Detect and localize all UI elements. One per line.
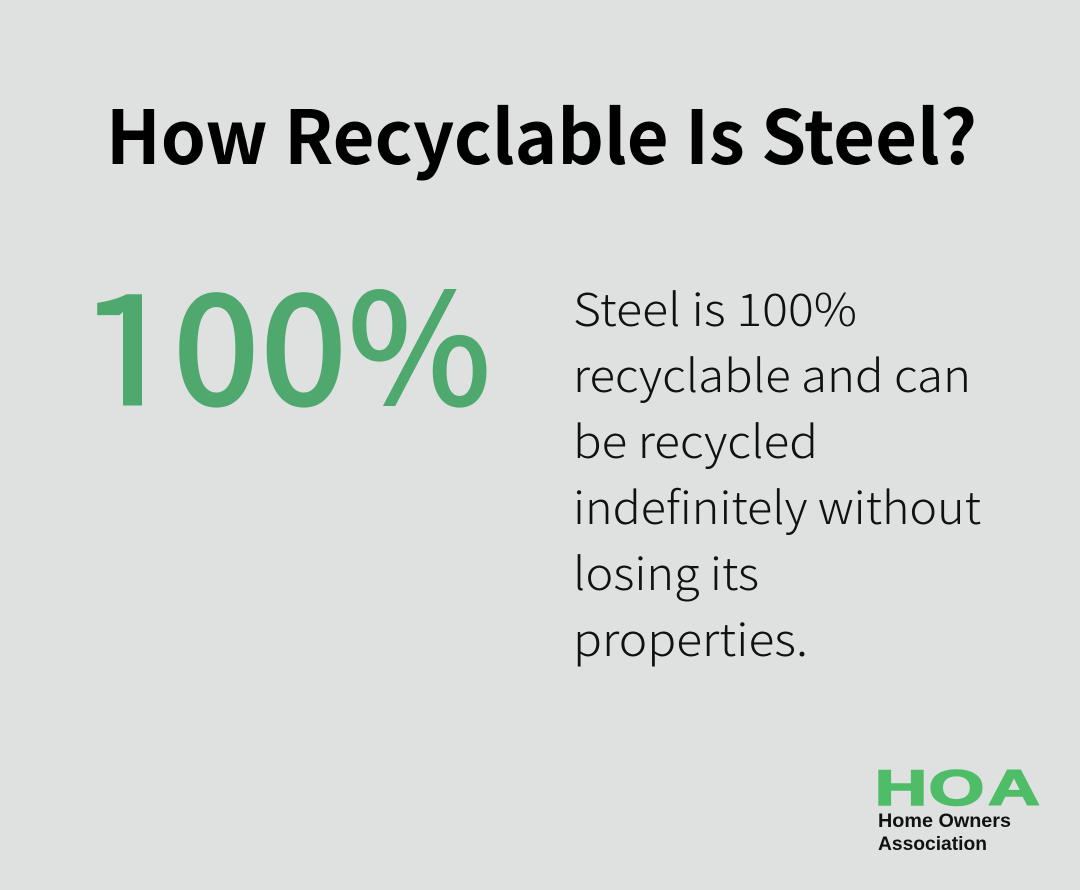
logo wordmark: Association — [878, 834, 987, 855]
description text block: properties. — [573, 604, 808, 669]
logo: Home Owners Association — [874, 760, 1040, 855]
logo mark: HOA: A — [988, 760, 1040, 816]
big statistic: 100%: 00% — [172, 227, 492, 450]
infographic canvas — [97, 104, 1040, 850]
description text block: be recycled — [573, 406, 818, 471]
logo mark: HOA: H — [874, 760, 928, 816]
big statistic: 100% — [97, 289, 486, 408]
logo mark: HOA — [874, 760, 1040, 816]
description text block — [573, 274, 981, 669]
description text block: Steel is 100% — [573, 274, 857, 339]
description text block: recyclable and can — [573, 340, 971, 405]
big statistic: 100%: 1 — [77, 227, 180, 450]
title: How Recyclable Is Steel? — [106, 79, 977, 186]
logo mark: HOA: O — [928, 760, 984, 816]
description text block: indefinitely without — [573, 472, 981, 537]
description text block: losing its — [573, 538, 759, 603]
logo wordmark — [878, 811, 1011, 855]
logo wordmark: Home Owners — [878, 811, 1011, 832]
